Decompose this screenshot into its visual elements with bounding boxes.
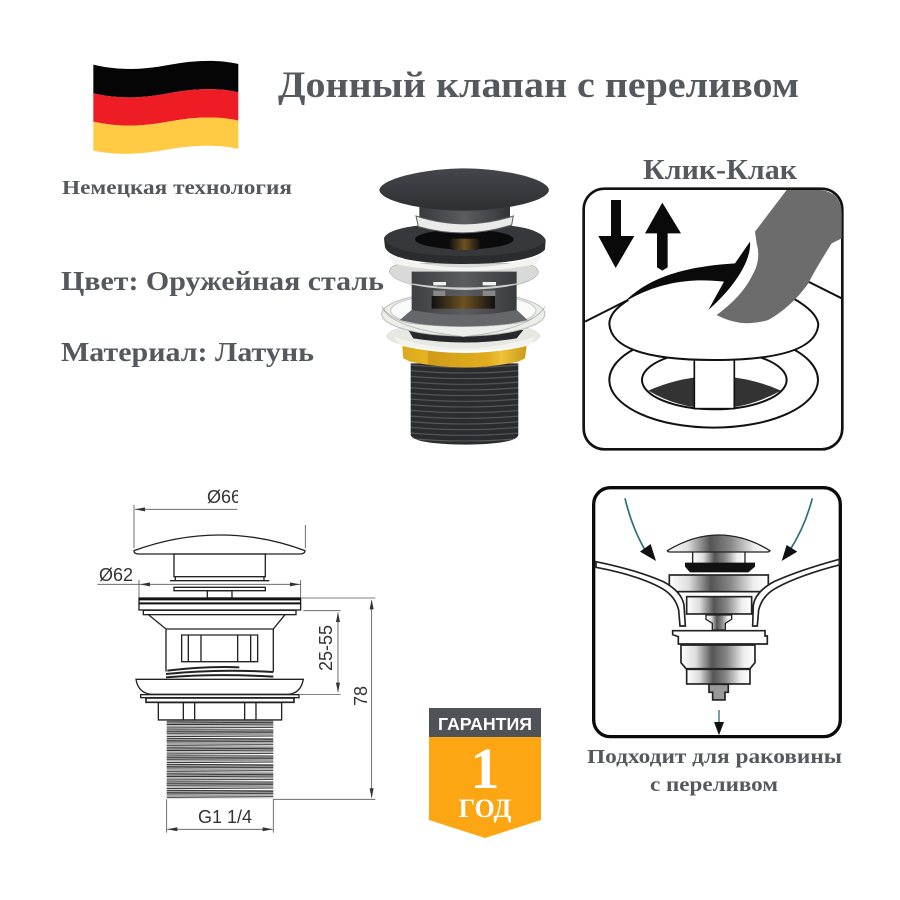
dimension label: 78: 78 <box>351 686 371 706</box>
white post <box>694 357 734 409</box>
sink right wall <box>753 559 839 626</box>
badge unit: ГОД <box>459 794 511 823</box>
grey upper ring <box>389 263 538 290</box>
arrowheads <box>135 507 374 831</box>
white flange band <box>388 255 542 271</box>
sink left wall <box>596 562 685 626</box>
stem <box>419 207 510 225</box>
body window <box>432 296 495 309</box>
neck <box>706 615 732 630</box>
frame <box>584 189 842 449</box>
white ring <box>416 216 513 233</box>
stem <box>693 552 745 564</box>
inner ring <box>642 351 787 409</box>
dark drain opening <box>648 376 781 409</box>
nut <box>158 703 282 720</box>
dimension label: diameter 62: Ø62 <box>99 565 133 585</box>
curved arrow <box>623 242 750 310</box>
text: colour: Цвет: Оружейная сталь <box>61 266 384 296</box>
window <box>182 635 258 662</box>
dark gap below bowl <box>408 330 523 342</box>
lower body <box>681 645 755 669</box>
lower flange <box>673 631 767 644</box>
white washer edge <box>393 337 535 351</box>
title: Донный клапан с переливом <box>278 65 799 106</box>
down arrow <box>717 710 721 723</box>
caption: German technology: Немецкая технология <box>62 177 292 199</box>
bolt <box>709 684 728 700</box>
lower washer <box>387 322 540 350</box>
technical drawing with dimensions <box>97 505 375 833</box>
flange hole <box>415 229 514 249</box>
upper flange <box>669 575 768 592</box>
down arrow <box>598 200 634 268</box>
product photo: drain valve <box>379 168 549 445</box>
clips <box>433 282 496 285</box>
upper threads <box>166 667 273 677</box>
frame <box>594 488 840 737</box>
warranty badge <box>429 708 541 838</box>
second flange <box>136 679 303 694</box>
up arrow <box>645 203 681 271</box>
caption: fits sinks with overflow <box>587 746 842 796</box>
finger <box>717 190 842 323</box>
icon: German flag <box>93 61 238 154</box>
badge header <box>429 708 541 737</box>
bowl ring front <box>382 307 545 337</box>
cap <box>667 535 770 552</box>
cone and body <box>148 615 285 672</box>
brass nut <box>402 346 527 367</box>
text: material: Материал: Латунь <box>61 337 314 367</box>
caption: fits sinks with overflow: с переливом <box>650 774 778 796</box>
stem <box>174 554 265 577</box>
caption: fits sinks with overflow: Подходит для раковины <box>587 746 842 768</box>
basin lines <box>585 282 842 322</box>
badge body <box>429 737 541 838</box>
cap <box>134 535 305 554</box>
panel: overflow sink diagram <box>594 488 840 737</box>
body <box>687 597 752 614</box>
outer ring <box>609 332 818 428</box>
threads <box>167 721 273 799</box>
dimension lines <box>97 505 375 833</box>
heading: click-clack: Клик-Клак <box>643 155 798 186</box>
teal water arrows <box>625 498 812 550</box>
dimension label: diameter 66: Ø66 <box>207 487 241 507</box>
dark flange <box>384 223 546 264</box>
arrowheads <box>640 544 797 561</box>
flange <box>139 598 301 610</box>
dimension label: G1 1/4: G1 1/4 <box>198 807 252 827</box>
badge number: 1 <box>470 736 500 801</box>
grey ring front <box>389 272 538 290</box>
pop-up cap <box>609 263 818 360</box>
white bowl ring <box>382 292 545 336</box>
cap <box>379 168 549 211</box>
dimension label: 25-55: 25-55 <box>316 625 336 671</box>
valve body <box>400 272 527 327</box>
bottom body <box>687 669 750 684</box>
badge header text: ГАРАНТИЯ <box>438 714 532 734</box>
rubber band <box>685 563 755 572</box>
panel: click-clack diagram <box>584 189 842 449</box>
threaded shank <box>411 363 518 445</box>
